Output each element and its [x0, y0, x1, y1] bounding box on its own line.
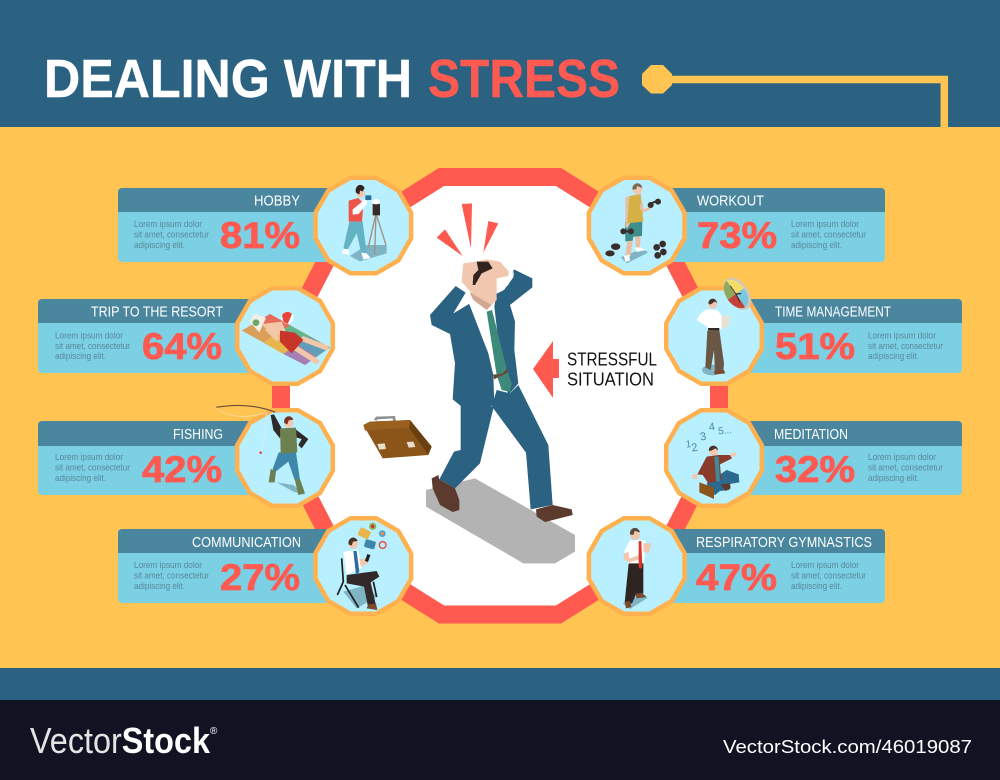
image id: VectorStock.com/46019087: [723, 737, 972, 757]
card: [722, 299, 962, 373]
label: stressful situation: [567, 348, 657, 390]
card: [118, 529, 358, 603]
percentage: 81%: [220, 215, 300, 256]
heading: RESPIRATORY GYMNASTICS: [696, 534, 872, 551]
tie: [487, 310, 512, 392]
panel: trip to the resort: [38, 288, 333, 384]
badge: [316, 518, 411, 614]
description: adipiscing elit.: [791, 581, 842, 592]
icon: meditating man: 3: [699, 431, 707, 444]
description: sit amet, consectetur: [791, 570, 866, 581]
heading: TRIP TO THE RESORT: [91, 304, 223, 321]
card: [38, 421, 278, 495]
description: Lorem ipsum dolor: [868, 452, 936, 463]
label: stressful situation: SITUATION: [567, 368, 654, 390]
panel: respiratory gymnastics: [589, 518, 885, 614]
description: sit amet, consectetur: [55, 341, 130, 352]
percentage: 42%: [142, 449, 222, 490]
percentage: 27%: [220, 557, 300, 598]
briefcase: [363, 416, 432, 458]
badge: [589, 518, 684, 614]
brand logo: VectorStock: [30, 720, 211, 761]
description: [868, 452, 943, 484]
icon: meditating man: 2: [690, 442, 699, 455]
registered mark: ®: [210, 726, 218, 737]
right sleeve and panel: [494, 269, 532, 395]
stress marks: [437, 203, 498, 256]
icon: photographer: [342, 185, 387, 261]
right shoe: [536, 505, 573, 522]
description: adipiscing elit.: [791, 240, 842, 251]
badge: [589, 178, 684, 273]
percentage: 51%: [775, 326, 855, 367]
description: [791, 219, 866, 251]
watermark bar: [0, 700, 1000, 780]
panel: workout: [589, 178, 885, 273]
description: Lorem ipsum dolor: [868, 331, 936, 342]
description: [134, 219, 209, 251]
icon: man with dumbbells: [605, 183, 667, 263]
badge: [237, 410, 333, 506]
neck: [470, 290, 492, 310]
jacket: [430, 286, 494, 407]
panel: meditation: [666, 410, 962, 506]
description: [791, 560, 866, 592]
panel: communication: [118, 518, 411, 614]
description: adipiscing elit.: [55, 473, 106, 484]
icon: meditating man: 1: [685, 439, 692, 451]
icon: sunbather: [242, 312, 330, 365]
description: sit amet, consectetur: [868, 463, 943, 474]
white cuffs: [453, 295, 470, 313]
description: sit amet, consectetur: [55, 463, 130, 474]
description: adipiscing elit.: [134, 240, 185, 251]
badge: [237, 288, 333, 384]
floor shadow: [426, 478, 575, 563]
description: adipiscing elit.: [134, 581, 185, 592]
percentage: 32%: [775, 449, 855, 490]
card: [118, 188, 358, 262]
icon: meditating man: 4: [708, 421, 716, 434]
icon: meditating man: 5...: [718, 425, 732, 437]
badge: [666, 288, 762, 384]
icon: man and clock: [697, 273, 757, 375]
card: [645, 529, 885, 603]
badge: [666, 410, 762, 506]
description: Lorem ipsum dolor: [55, 331, 123, 342]
title: DEALING WITH: [44, 49, 412, 109]
central figure: [426, 203, 575, 563]
description: sit amet, consectetur: [134, 570, 209, 581]
description: [55, 331, 130, 362]
heading: COMMUNICATION: [192, 534, 301, 551]
icon: angler: [216, 405, 308, 495]
percentage: 73%: [697, 215, 777, 256]
shirt: [470, 303, 508, 378]
heading: TIME MANAGEMENT: [775, 304, 891, 321]
description: [134, 560, 209, 592]
panel: fishing: [38, 405, 333, 506]
icon: meditating man: [685, 421, 739, 499]
header band: [0, 0, 1000, 127]
description: sit amet, consectetur: [791, 230, 866, 241]
description: adipiscing elit.: [55, 351, 106, 362]
heading: HOBBY: [254, 192, 300, 210]
belt: [493, 368, 508, 379]
red ring: [281, 177, 719, 614]
card: [645, 188, 885, 262]
hair: [473, 262, 493, 285]
title accent word: STRESS: [428, 49, 620, 109]
heading: FISHING: [173, 426, 223, 443]
icon: man with phone: [337, 523, 386, 610]
heading: WORKOUT: [697, 192, 764, 210]
badge: [316, 178, 411, 273]
percentage: 47%: [696, 557, 777, 598]
panel: time management: [666, 273, 962, 384]
description: [868, 331, 943, 362]
percentage: 64%: [142, 326, 222, 367]
trousers: [439, 385, 553, 509]
description: sit amet, consectetur: [134, 230, 209, 241]
panel: hobby: [118, 178, 411, 273]
head and hands: [462, 259, 509, 305]
description: sit amet, consectetur: [868, 341, 943, 352]
description: adipiscing elit.: [868, 473, 919, 484]
description: Lorem ipsum dolor: [791, 560, 859, 571]
description: [55, 452, 130, 484]
icon: breathing man: [623, 528, 655, 609]
card: [722, 421, 962, 495]
description: Lorem ipsum dolor: [134, 560, 202, 571]
footer band: [0, 668, 1000, 700]
heading: MEDITATION: [774, 426, 848, 443]
description: Lorem ipsum dolor: [791, 219, 859, 230]
label: stressful situation: STRESSFUL: [567, 348, 657, 370]
left shoe: [432, 475, 459, 512]
header connector: [642, 65, 944, 127]
arrow: [533, 341, 559, 398]
description: Lorem ipsum dolor: [134, 219, 202, 230]
description: Lorem ipsum dolor: [55, 452, 123, 463]
description: adipiscing elit.: [868, 351, 919, 362]
card: [38, 299, 278, 373]
